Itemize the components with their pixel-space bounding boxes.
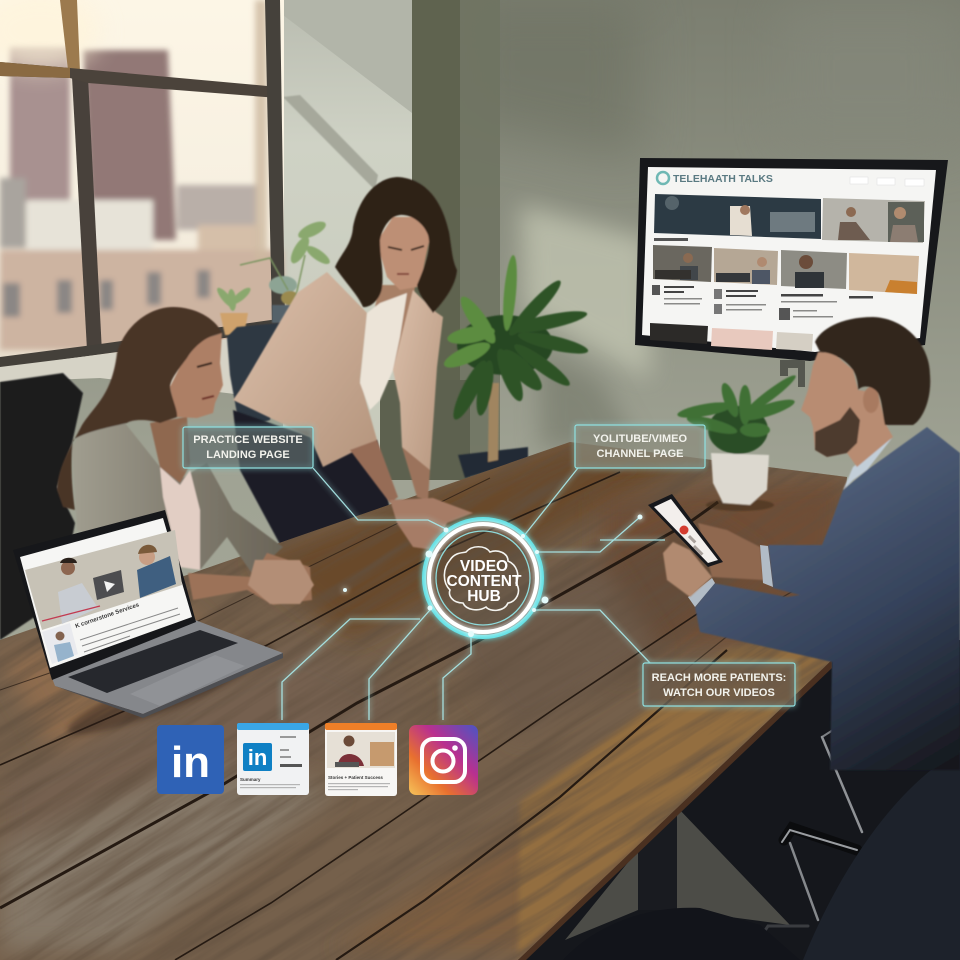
chair behind standing woman: [227, 322, 290, 430]
hub: video content hub: [343, 514, 642, 638]
card: linkedin post: [237, 723, 309, 795]
office chair frame and chair backs: [563, 730, 960, 960]
monitor channel title: TELEHAATH TALKS: [673, 173, 773, 185]
monitor hero side image: [822, 198, 925, 243]
hub cloud outline: [444, 547, 518, 610]
callout: practice website landing page: [183, 427, 313, 468]
seated man: [695, 317, 960, 770]
card: video post: Stories + Patient Success: [328, 775, 383, 780]
laptop with website: [13, 510, 283, 748]
icon: linkedin: [157, 725, 224, 794]
card: linkedin post: in: [248, 745, 267, 770]
laptop base: [52, 620, 283, 714]
shirt cuffs: [688, 545, 773, 607]
wall monitor: Telehealth Talks channel page: [635, 158, 948, 361]
icon: instagram: [409, 725, 478, 795]
seated woman: [57, 307, 314, 605]
space under table: legs and floor: [510, 640, 960, 960]
card: linkedin post: Summary: [240, 777, 261, 782]
monitor hero banner: [654, 194, 821, 239]
monitor text rows: [652, 238, 873, 320]
man's jacket: [695, 427, 960, 770]
hub label: CONTENT: [447, 573, 522, 590]
laptop keyboard: [68, 630, 238, 693]
card: video post: [325, 723, 397, 796]
hub node dots: [343, 514, 642, 637]
callout: youtube/vimeo channel page: [575, 425, 705, 468]
large potted plant: [441, 255, 590, 478]
monitor logo mark: [657, 172, 669, 184]
callout: reach more patients: WATCH OUR VIDEOS: [663, 687, 775, 699]
hub label: VIDEO: [460, 558, 508, 575]
standing woman's trousers: [233, 410, 390, 550]
laptop thumbnail and copy: K cornerstone Services: [75, 602, 141, 630]
man's upper hand: [698, 523, 763, 580]
hub label: HUB: [467, 588, 501, 605]
window with city view: [0, 0, 285, 400]
callout: reach more patients: [643, 663, 795, 706]
man's lower hand: [663, 542, 712, 597]
callout: youtube/vimeo channel page: YOLITUBE/VIMEO: [593, 433, 687, 445]
callout: practice website landing page: PRACTICE WEBSITE: [193, 434, 303, 446]
monitor nav buttons: [850, 177, 924, 186]
standing woman: [233, 177, 473, 550]
smartphone: [648, 494, 723, 567]
callout: practice website landing page: LANDING PAGE: [206, 449, 290, 461]
callout: reach more patients: REACH MORE PATIENTS:: [652, 672, 786, 684]
connector lines: [282, 468, 665, 720]
wooden table: [0, 442, 847, 960]
plants on window sill: [215, 218, 332, 335]
icon: linkedin: in: [171, 738, 210, 787]
callout: youtube/vimeo channel page: CHANNEL PAGE: [596, 448, 684, 460]
laptop screen: [20, 518, 192, 668]
left chair: [0, 373, 83, 640]
monitor wall bracket: [780, 360, 805, 387]
small potted plant: [676, 372, 799, 511]
laptop thumbnail and copy: [42, 602, 180, 664]
laptop lid: [13, 510, 196, 680]
laptop video: [25, 530, 182, 630]
monitor bottom thumbnails: [650, 323, 813, 351]
monitor video thumbnails: [653, 245, 919, 294]
